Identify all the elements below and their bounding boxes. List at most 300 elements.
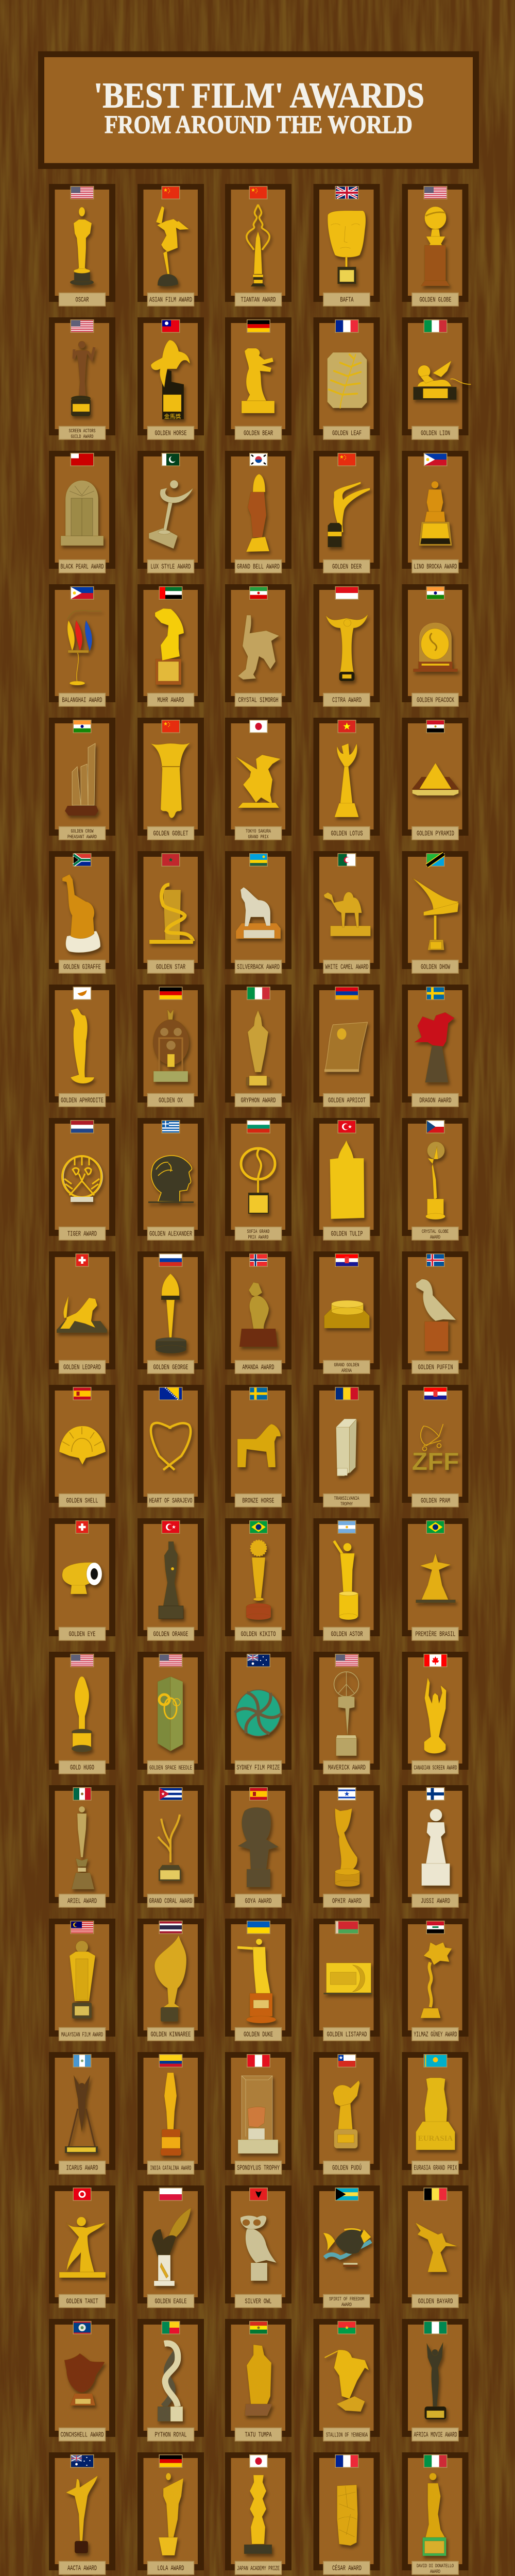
card: Transilvania Trophy [313,1385,380,1507]
flag: South Africa [73,853,92,867]
card: Golden Peacock [402,584,469,706]
trophy: Golden Orange [159,1541,183,1619]
card: Golden Giraffe [49,851,115,973]
label: BAFTA: BAFTA [340,296,354,304]
flag: Turkey [338,1120,356,1133]
label: Africa Movie Award: AFRICA MOVIE AWARD [414,2431,457,2439]
trophy: Icarus Award [65,2075,98,2153]
label: Golden Goblet: GOLDEN GOBLET [153,829,188,838]
trophy: Lola Award [159,2473,183,2555]
label: Dragon Award: DRAGON AWARD [419,1096,451,1105]
trophy: Golden Dhow [412,878,458,950]
card: Golden Pudu [313,2052,380,2174]
trophy: Ariel Award [72,1806,94,1889]
card: Spirit of Freedom Award [313,2185,380,2308]
flag: Belize [73,2321,92,2334]
card: Ariel Award [49,1785,115,1907]
label: Sofia Grand Prix Award: PRIX AWARD [248,1234,269,1241]
card: Golden Eagle [138,2185,204,2308]
flag: Romania [335,1387,358,1400]
trophy: Golden Lotus [335,743,358,817]
trophy: Golden Crow Pheasant [65,743,98,816]
trophy: Crystal Globe [425,1142,445,1219]
label: Golden Crow Pheasant Award: GOLDEN CROW [71,828,94,835]
flag: Croatia [423,1387,447,1400]
flag: Tunisia [73,2188,92,2201]
title panel [38,52,479,169]
label: Tokyo Sakura Grand Prix [246,828,271,840]
flag: Sweden [426,987,445,1000]
trophy: César Award [337,2485,357,2546]
label: Icarus Award: ICARUS AWARD [66,2164,98,2172]
label: Black Pearl Award: BLACK PEARL AWARD [61,563,104,571]
label: Grand Golden Arena: GRAND GOLDEN [334,1362,359,1368]
label: Japan Academy Prize: JAPAN ACADEMY PRIZE [237,2565,280,2572]
label: Transilvania Trophy: TRANSILVANIA [334,1496,359,1502]
flag: UK [335,186,358,199]
card: Lola Award [138,2452,204,2574]
card: Premiere Brasil [402,1518,469,1640]
flag: Italy [247,987,270,1000]
card: Golden Bayard [402,2185,469,2308]
flag: Mexico [73,1787,92,1801]
trophy: Golden Pram [412,1424,459,1476]
card: Tiger Award [49,1118,115,1240]
card: Golden Orange [138,1518,204,1640]
flag: France [335,319,358,333]
label: Ophir Award: OPHIR AWARD [332,1897,362,1905]
trophy: Golden Eagle [152,2208,191,2286]
label: Golden Ox: GOLDEN OX [159,1096,183,1105]
card: Tatu Tumpa [225,2319,291,2441]
flag: Armenia [335,987,358,1000]
label: Golden Tulip: GOLDEN TULIP [331,1230,363,1239]
card: Grand Bell Award [225,451,291,573]
label: AACTA Award: AACTA AWARD [67,2565,97,2573]
flag: Cuba [159,1787,182,1801]
label: Golden Space Needle: GOLDEN SPACE NEEDLE [149,1764,192,1771]
label: Crystal Simorgh: CRYSTAL SIMORGH [238,697,278,705]
card: Golden Shell [49,1385,115,1507]
card: Golden Bear [225,317,291,439]
trophy: White Camel Award [323,892,371,936]
trophy: Conchshell Award [64,2353,105,2405]
label: Golden Aphrodite: GOLDEN APHRODITE [61,1096,104,1105]
flag: Taiwan [162,319,180,333]
trophy: SAG actor [71,341,94,416]
label: Golden Lotus: GOLDEN LOTUS [331,829,363,838]
trophy: Balanghai Award [67,611,101,685]
card: Golden Aphrodite [49,985,115,1107]
label: Golden Kinnaree: GOLDEN KINNAREE [150,2031,191,2039]
label: Yilmaz Guney Award: YILMAZ GÜNEY AWARD [414,2030,457,2039]
trophy: Golden Goblet [150,742,191,818]
flag: Ukraine [247,1921,270,1934]
card: Lino Brocka Award [402,451,469,573]
label: Golden Bear: GOLDEN BEAR [244,430,273,438]
label: Golden Astor: GOLDEN ASTOR [331,1630,363,1638]
label: Stallion of Yennenga: STALLION OF YENNENGA [326,2432,368,2439]
flag: Malaysia [70,1921,94,1934]
card: Golden Apricot [313,985,380,1107]
flag: Thailand [159,1921,182,1934]
trophy: Golden Horse: 金馬獎 [164,413,181,420]
flag: Switzerland [75,1253,89,1267]
flag: Cyprus [73,987,92,1000]
flag: Kazakhstan [423,2054,447,2067]
card: Grand Coral Award [138,1785,204,1907]
label: Silverback Award: SILVERBACK AWARD [237,963,280,972]
card: Golden Pram [402,1385,469,1507]
card: Citra Award [313,584,380,706]
label: Golden Kikito: GOLDEN KIKITO [241,1630,276,1638]
card: White Camel Award [313,851,380,973]
trophy: Golden Leaf [328,352,367,408]
card: Golden Puffin [402,1251,469,1374]
trophy: Lux Style Award [149,480,193,549]
label: Golden Globe: GOLDEN GLOBE [419,296,451,304]
card: Golden Goblet [138,718,204,840]
flag: USA [159,1654,182,1667]
trophy: Golden Kinnaree [154,1935,186,2022]
flag: Algeria [338,853,356,867]
flag: Czech Republic [426,1120,445,1133]
label: Ariel Award: ARIEL AWARD [67,1897,97,1905]
flag: Benin [162,2321,180,2334]
trophy: Golden Kikito [246,1540,271,1620]
card: Golden Kikito [225,1518,291,1640]
card: Bronze Horse [225,1385,291,1507]
card: Amanda Award [225,1251,291,1374]
title panel: FROM AROUND THE WORLD [105,110,413,139]
trophy: Citra Award [325,614,368,681]
trophy: Goya Award [238,1807,279,1887]
label: David di Donatello Award [417,2563,454,2575]
flag: Brazil [249,1520,268,1534]
trophy: Yilmaz Güney Award [420,1942,452,2018]
card: Golden Kinnaree [138,1919,204,2041]
trophy: Spondylus Trophy [238,2076,278,2154]
card: Heart of Sarajevo [138,1385,204,1507]
label: Golden Puffin: GOLDEN PUFFIN [418,1363,453,1371]
card: Sofia Grand Prix Award [225,1118,291,1241]
flag: Bosnia and Herzegovina [159,1387,182,1400]
flag: Germany [247,319,270,333]
trophy: Golden Listapad [323,1963,372,1994]
label: Crystal Globe Award [422,1229,449,1241]
card: Cesar Award [313,2452,380,2574]
trophy: AACTA Award [66,2476,98,2553]
flag: Australia [247,1654,270,1667]
label: Grand Golden Arena: ARENA [341,1368,352,1374]
label: Tatu Tumpa: TATU TUMPA [245,2431,272,2439]
flag: Bolivia [249,2321,268,2334]
label: Canadian Screen Award: CANADIAN SCREEN AWARD [414,1764,457,1771]
flag: Norway [249,1253,268,1267]
flag: Australia [70,2454,94,2468]
card: Golden Space Needle [138,1652,204,1774]
card: Tokyo Sakura Grand Prix [225,718,291,840]
label: Tiantan Award: TIANTAN AWARD [241,296,276,304]
flag: Croatia [335,1253,358,1267]
label: Golden Pudu: GOLDEN PUDÚ [332,2163,362,2172]
label: Cesar Award: CÉSAR AWARD [332,2564,362,2573]
flag: Netherlands [70,1120,94,1133]
card: Conchshell Award [49,2319,115,2441]
label: Sydney Film Prize: SYDNEY FILM PRIZE [237,1764,280,1772]
label: Golden Tanit: GOLDEN TANIT [66,2298,98,2306]
trophy: Africa Movie Award [424,2342,446,2419]
label: Screen Actors Guild Award [69,428,96,440]
flag: Vietnam [338,720,356,733]
trophy: Sydney Film Prize [235,1690,282,1736]
card: Malaysian Film Award [49,1919,115,2041]
card: Golden Leopard [49,1251,115,1374]
trophy: Golden Giraffe [62,874,100,953]
trophy: Première Brasil [416,1553,455,1603]
label: David di Donatello Award: AWARD [430,2569,440,2575]
card: Golden Tanit [49,2185,115,2308]
label: Tokyo Sakura Grand Prix: GRAND PRIX [248,834,269,840]
trophy: Silverback Award [236,887,281,939]
card: Lux Style Award [138,451,204,573]
label: Spondylus Trophy: SPONDYLUS TROPHY [237,2164,280,2172]
label: Balanghai Award: BALANGHAI AWARD [62,697,102,705]
card: Muhr Award [138,584,204,706]
flag: Philippines [423,453,447,466]
card: Golden Eye [49,1518,115,1640]
flag: Egypt [426,720,445,733]
flag: Spain [73,1387,92,1400]
flag: Rwanda [249,853,268,867]
card: Tiantan Award [225,184,291,306]
card: Golden Pyramid [402,718,469,840]
card: Golden Deer [313,451,380,573]
card: Golden Dhow [402,851,469,973]
trophy: Golden Pram: ZFF [412,1448,459,1476]
card: Golden Lion [402,317,471,439]
trophy: Golden Eye [62,1563,102,1594]
trophy: Spirit of Freedom [323,2229,371,2267]
trophy: Golden Bear [242,348,274,413]
trophy: Golden Space Needle [158,1676,183,1751]
flag: Japan [249,2454,268,2468]
label: Golden Deer: GOLDEN DEER [332,563,362,571]
flag: Argentina [338,1520,356,1534]
label: Golden Listapad: GOLDEN LISTAPAD [327,2031,367,2039]
trophy: Golden Globe [421,207,450,286]
flag: Turkey [162,1520,180,1534]
card: Spondylus Trophy [225,2052,291,2174]
label: Golden Shell: GOLDEN SHELL [66,1497,98,1505]
label: David di Donatello Award: DAVID DI DONATELLO [417,2563,454,2569]
card: Crystal Globe Award [402,1118,469,1241]
label: Lola Award: LOLA AWARD [158,2565,184,2573]
flag: Russia [159,1253,182,1267]
trophy: Golden Star [149,885,193,944]
trophy: Golden Deer [328,482,370,547]
trophy: Gold Hugo [72,1676,92,1752]
card: Golden Star [138,851,204,973]
label: Tokyo Sakura Grand Prix: TOKYO SAKURA [246,828,271,835]
flag: Colombia [159,2054,182,2067]
trophy: Golden Horse [151,340,190,420]
trophy: BAFTA [328,211,366,284]
card: Golden Globe [402,184,469,306]
trophy: Canadian Screen Award [424,1677,446,1754]
label: Screen Actors Guild Award: SCREEN ACTORS [69,428,96,434]
flag: Greece [162,1120,180,1133]
card: Dragon Award [402,985,469,1107]
trophy: Transilvania Trophy [336,1419,356,1476]
card: Jussi Award [402,1785,469,1907]
label: Oscar: OSCAR [75,296,89,304]
trophy: Crystal Simorgh [238,615,279,680]
label: Golden Orange: GOLDEN ORANGE [153,1630,188,1638]
flag: South Korea [249,453,268,466]
title panel: 'BEST FILM' AWARDS [94,76,424,115]
trophy: Golden Peacock [413,623,457,672]
card: Golden Ox [138,985,204,1107]
card: Balanghai Award [49,584,115,706]
card: Asian Film Award [138,184,204,306]
label: Golden Lion: GOLDEN LION [421,430,450,438]
flag: Iceland [426,1253,445,1267]
flag: Philippines [70,586,94,600]
trophy: David di Donatello [422,2473,446,2556]
flag: USA [70,186,94,199]
trophy: Grand Bell Award [246,474,269,552]
flag: Spain [249,1787,268,1801]
card: Canadian Screen Award [402,1652,469,1774]
label: Golden Peacock: GOLDEN PEACOCK [417,697,454,705]
label: Transilvania Trophy: TROPHY [340,1501,353,1507]
card: Silverback Award [225,851,291,973]
flag: Brazil [426,1520,445,1534]
card: David di Donatello Award [402,2452,469,2575]
flag: India [426,586,445,600]
flag: Germany [159,987,182,1000]
flag: Albania [249,2188,268,2201]
card: Maverick Award [313,1652,380,1774]
label: Golden Apricot: GOLDEN APRICOT [328,1096,366,1105]
flag: Sweden [249,1387,268,1400]
label: Python Royal: PYTHON ROYAL [154,2431,186,2439]
flag: China [162,186,180,199]
flag: Canada [423,1654,447,1667]
flag: Switzerland [75,1520,89,1534]
label: Heart of Sarajevo: HEART OF SARAJEVO [149,1497,193,1505]
flag: Pakistan [162,453,180,466]
flag: Burkina Faso [338,2321,356,2334]
flag: USA [423,186,447,199]
label: Spirit of Freedom Award: SPIRIT OF FREEDOM [329,2296,364,2302]
trophy: Golden Leopard [57,1295,107,1333]
card: Yilmaz Guney Award [402,1919,469,2041]
card: Golden Leaf [313,317,380,439]
trophy: Gryphon Award [246,1010,270,1086]
card: Sydney Film Prize [225,1652,291,1774]
trophy: Maverick Award [334,1672,358,1756]
trophy: Dragon Award [414,1012,454,1082]
label: Golden Crow Pheasant Award [67,828,97,840]
flag: Peru [247,2054,270,2067]
card: BAFTA [313,184,380,306]
label: Silver Owl: SILVER OWL [245,2298,272,2306]
card: Golden Duke [225,1919,291,2041]
trophy: Grand Coral Award [158,1815,181,1881]
card: Python Royal [138,2319,204,2441]
card: Eurasia Grand Prix [402,2052,469,2174]
label: Grand Coral Award: GRAND CORAL AWARD [149,1897,193,1905]
label: Eurasia Grand Prix: EURASIA GRAND PRIX [414,2164,457,2172]
trophy: Tokyo Sakura griffin [235,755,281,808]
card: Golden Crow Pheasant Award [49,718,115,840]
trophy: Oscar [70,207,94,285]
trophy: Golden Apricot [324,1022,368,1072]
card: India Catalina Award [138,2052,204,2174]
trophy: Golden Bayard [415,2223,457,2272]
label: Conchshell Award: CONCHSHELL AWARD [61,2431,104,2439]
flag: Iraq [426,1921,445,1934]
trophy: Golden Puffin [416,1279,456,1351]
flag: France [335,2454,358,2468]
label: Premiere Brasil: PREMIÈRE BRASIL [415,1629,455,1638]
flag: Tanzania [426,853,445,867]
card: Oscar [49,184,115,306]
trophy: Japan Academy Prize [244,2475,272,2554]
label: Golden Eye: GOLDEN EYE [69,1630,96,1638]
trophy: Bronze Horse [237,1424,281,1467]
flag: Chile [338,2054,356,2067]
trophy: Golden Shell [59,1426,106,1465]
label: Grand Bell Award: GRAND BELL AWARD [237,563,280,571]
label: Golden Pram: GOLDEN PRAM [421,1497,450,1505]
flag: Belarus [335,1921,358,1934]
label: Crystal Globe Award: CRYSTAL GLOBE [422,1229,449,1235]
trophy: Ophir Award [335,1808,359,1887]
label: Asian Film Award: ASIAN FILM AWARD [149,296,192,304]
trophy: Grand Golden Arena [324,1300,370,1328]
label: Spirit of Freedom Award [329,2296,364,2308]
label: Grand Golden Arena [334,1362,359,1374]
label: Gryphon Award: GRYPHON AWARD [241,1096,276,1105]
card: Golden Tulip [313,1118,380,1240]
trophy: Tiantan Award [247,205,269,286]
flag: Germany [159,2454,182,2468]
flag: Japan [249,720,268,733]
flag: Bulgaria [247,1120,270,1133]
label: Malaysian Film Award: MALAYSIAN FILM AWARD [61,2031,103,2038]
label: Golden Duke: GOLDEN DUKE [244,2031,273,2039]
flag: China [338,453,356,466]
card: Golden Astor [313,1518,380,1640]
label: Golden Leaf: GOLDEN LEAF [332,430,362,438]
label: Bronze Horse: BRONZE HORSE [242,1497,274,1505]
flag: Israel [338,1787,356,1801]
flag: India [73,720,92,733]
flag: Finland [426,1787,445,1801]
label: Golden Alexander: GOLDEN ALEXANDER [149,1230,192,1239]
label: Sofia Grand Prix Award: SOFIA GRAND [247,1229,270,1235]
flag: Bahamas [335,2188,358,2201]
label: Maverick Award: MAVERICK AWARD [328,1764,366,1772]
trophy: Golden Duke [237,1939,276,2023]
card: Stallion of Yennenga [313,2319,380,2441]
flag: Nigeria [423,2321,447,2334]
trophy: Tiger Award [62,1156,102,1202]
trophy: Jussi Award [421,1809,450,1886]
